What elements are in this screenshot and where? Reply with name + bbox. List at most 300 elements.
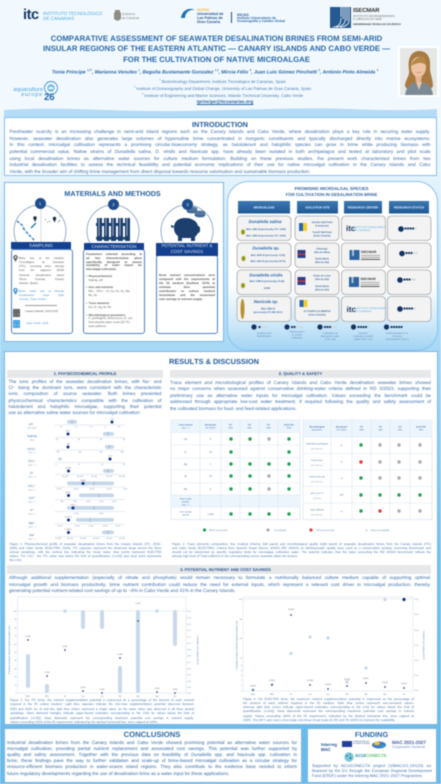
band: characterisation: CHARACTERISATION [92,244,136,249]
research center logos: INSTITUTO TECNOLÓGICO [355,306,386,310]
text: parameters intro: specifically designed to assess [86,260,142,264]
caption: figure 4: the amount of each nutrient required in the f/2 medium. Dark blue circles represent non-censored values, [243,701,414,705]
chart: physicochemical profile range plot: 5,000 [89,488,95,490]
algae icons [241,229,246,288]
isolation sites: Tenefé Salt Pans [312,231,332,234]
caption: figure 1: 2025) and Cabo Verde (ELECTRA; 2025). ITC capsules represent the observed range across the three [10,546,162,550]
right tick labels: 0.07 [187,661,192,664]
row labels: 5 [210,488,212,491]
list: parameters: NO₃⁻, PO₄³⁻, Si, Ca, Cu, Fe, Mn, [88,289,130,293]
caption: figure 3: quantification (<LOQ). Navy diamonds represent the corresponding maximum potential cost savings in nutrient supply. [10,716,194,720]
row labels: 100 [340,494,344,496]
heading: potential nutrient and cost savings: 3. POTENTIAL NUTRIENT AND COST SAVINGS [180,567,271,572]
chart: physicochemical profile range plot: 1,500 [98,512,104,515]
chart: physicochemical profile range plot: 7.8 [75,426,78,428]
text: parameters intro [86,252,142,272]
affiliations: 1 Biotechnology Department, Instituto Tecnológico de Canarias, Spain [159,79,286,84]
logo: Gobierno de Canarias: de Canarias [122,16,139,20]
row labels: Ca²⁺ [29,496,36,500]
row labels: (mg L⁻¹) [28,526,36,528]
category labels: Mn [364,693,368,696]
strain codes: BEA 1981 B (previously ITC- 5106) [246,228,286,231]
caption: figure 1: annual samplings, with the vertical line indicating the mean value; blue points represent ELECTRA [10,550,162,554]
row labels: 25 [209,451,212,454]
table: promising species [236,200,432,322]
chart: physicochemical profile range plot: 781.3 [70,504,76,506]
right tick labels: 0.03 [414,644,419,647]
logo: MAC 2021-2027: MAC 2021-2027 [392,740,426,746]
header labels: ITC [379,426,383,428]
logo: ULPGC and IOCAG: Instituto Universitario de [237,16,276,20]
text: ITC line: Tecnológico de Canarias [19,260,64,264]
category labels: Mo [155,695,159,698]
right tick labels: 0.00 [414,689,419,692]
row labels: Hg [184,463,188,466]
text: parameters intro: Parameters selected according to [86,252,142,256]
chart: physicochemical profile range plot: 200 [78,450,83,454]
left tick labels: 1 [241,684,243,687]
category labels: Co [327,693,330,696]
right tick labels: 0.10 [187,642,192,645]
chart: physicochemical profile range plot: 1,200 [98,500,104,503]
row labels: (UFC/mL) [313,497,322,500]
isolation sites: (Ilha do Sal) [315,261,329,264]
icon: grey pin [12,254,18,262]
header labels: ITC [267,424,271,426]
text: physicochemical: The ionic profiles of the seawater desalination brines, with Na⁺ and [8,379,162,384]
chart: physicochemical profile range plot: 17,000 [55,537,62,540]
right tick labels: 0.04 [414,629,419,632]
isolation sites: Pedra de Lume [313,274,331,278]
list: parameters: heterotrophic plate count (22 ºC), [88,320,130,324]
ELECTRA points [66,420,114,534]
caption: figure 4: 100%. The left Y-axis uses a two-range non-linear visual scale (0–5% and 70–100%) to improve the readability. [243,718,396,722]
strain codes [246,228,286,314]
header labels: RD 3/2023 [337,428,347,432]
logo: Gobierno de Canarias [113,9,140,22]
logo: Aquaculture Europe 26: aquaculture [13,86,43,92]
research center logos: itc [346,224,356,233]
isolation sites: (Gran Canaria) [309,314,326,316]
row labels: (mg L⁻¹) [28,464,36,466]
list: parameters: • Trace elements [86,301,109,305]
right tick labels: 0.06 [187,668,192,670]
capsules [26,609,177,693]
strain codes: BEA 1984 B (previously ITC- 5105) [246,234,286,238]
logo: ULPGC and IOCAG [180,8,286,24]
header labels: (µg L⁻¹) [182,426,189,430]
text: savings: Although additional supplementation (especially of nitrate and phosphate) would remain necessary to formulate a nutritionally balanced culture medium capable of supporting optimal [9,575,430,580]
value labels: 0.080 [26,635,30,638]
text: Cabo Verde line: Vicente, Cabo Verde) [19,297,46,301]
caption: figure 4: supply. Values exceeding 100% of the f/2 requirement, indicated by the dashed horizontal line, were capped at [243,714,414,718]
right tick labels: 0.08 [187,654,192,658]
chart: physicochemical profile range plot: 35,000 [106,475,113,478]
table headers [238,201,429,214]
left tick labels: 20 [14,676,17,678]
band: characterisation [84,243,144,250]
legend: research status scale: identification [257,335,272,338]
left tick labels: 10 [14,684,17,687]
left tick labels: 5 [241,664,243,667]
title: COMPARATIVE ASSESSMENT OF SEAWATER DESALINATION BRINES FROM SEMI-ARID [51,34,382,43]
right tick labels: 0.06 [414,598,419,601]
logo: ISECMAR: ISECMAR [353,8,379,14]
legend: quality status [202,528,390,532]
right tick labels: 0.15 [187,610,192,613]
chart: physicochemical profile range plot: 4,000 [73,488,79,490]
row labels: CO₃²⁻ [28,459,37,463]
chart: physicochemical profile range plot: 800 [60,500,65,503]
research center logos: DE CANARIAS [354,229,371,232]
category labels: Zn [403,693,406,696]
isolation sites: (Ilha do Sal) [315,278,329,281]
axis titles: Potential saving in nutrient supplementation (%) [8,625,11,674]
text: quality and safety [170,380,432,412]
logo: ACUICONECTA [344,752,390,762]
status dots [378,443,422,513]
table headers: RESEARCH STATUS [394,206,424,210]
text: parameters intro: suitability of water inputs for [86,263,142,267]
chart: physicochemical profile range plot: 36.2 [66,430,71,432]
row labels: indicator [182,500,190,504]
left tick labels: 80 [240,637,243,640]
category labels [251,693,406,696]
row labels [306,442,344,516]
row labels: Ni [184,475,187,478]
left tick labels [13,610,17,695]
band: cost savings [156,243,218,256]
row labels: (mg L⁻¹) [28,451,36,454]
band: cost savings: POTENTIAL NUTRIENT & [162,243,212,248]
section 1: physicochemical profile [7,370,163,416]
title: FOR THE CULTIVATION OF NATIVE MICROALGAE [123,55,310,64]
caption: figure 4: whereas light blue circles indicate upper-bound estimates corresponding to the LOQ for values below the limit of [243,705,414,709]
right tick labels: 0.13 [187,623,192,626]
header labels: 2025 [419,428,424,432]
number badge 2: 2 [112,202,115,206]
research center logos: ISECMAR [360,277,376,281]
chart: physicochemical profile range plot: 45 [100,438,103,441]
logo: ISECMAR [329,6,402,29]
chart: physicochemical profile range plot: 50 [123,438,126,441]
text: conclusions: brine, these findings pave the way to further validation and scale-up of brine-based microalgal cultivation as a circular strategy for [7,758,297,763]
value labels: 0.0020 [382,681,388,684]
text: cost savings: contribution to culture medium [159,289,215,293]
panel: materials and methods [4,182,224,342]
legend: research status scale: Isolation and [257,332,272,335]
heading: introduction: INTRODUCTION [192,120,248,128]
value labels: 0.000 [173,688,177,691]
text: introduction body: Verde, with the broader aim of shifting brine management from direct disposal towards resource valorisation and sustainable biomass production. [10,169,310,174]
text: ITC line: Islands, Spain). [19,281,39,285]
text: funding acknowledgement: Fund (ERDF) under the Interreg MAC 2021–2027 Programme. [312,773,423,778]
text: introduction body: In this context, microalgal cultivation represents a promising circular-bioeconomy strategy, as halotolerant and halophilic species can grow in brine while producing biomass with [10,142,430,147]
value labels: 0.0014 [401,682,407,685]
row labels: Cd [184,438,188,441]
row labels: chlorine [182,514,190,516]
species names: Navicula sp. [254,299,278,304]
caption: figure 4: quantification (<LOQ). Navy diamonds represent the corresponding maximum potential cost savings in nutrient [243,709,414,713]
caption: figure 2: already high level of Total coliforms in the corresponding source seawater (data not shown). [172,554,298,558]
text: introduction body: However, seawater desalination also generates large volumes of hypersaline brine concentrated in inorganic constituents and typically discharged directly into marine ecosystems. [10,136,430,141]
value labels: 0.000 [100,688,104,691]
status dots [229,437,291,516]
chart: ELECTRA nutrient supplementation: Potential cost savings (€/m³) [422,631,425,660]
species names [249,219,283,304]
left tick labels: 30 [14,668,17,670]
band: sampling: SAMPLING [29,243,53,248]
chart: physicochemical profile range plot: 1,000 [85,500,91,503]
left tick labels: 90 [14,618,17,621]
chart: physicochemical profile range plot: 25,000 [77,475,84,478]
text: Cabo Verde line: Brine outlet line at Melnda [19,288,64,292]
strain codes: BEA 1904 B (previously DP73) [251,260,286,263]
logo: MAC 2021-2027: Cooperación Territorial [392,744,425,748]
row labels: Total coliforms [310,508,325,512]
category labels: Fe [119,695,122,698]
legend: research status scale: cultivation at pilot [353,335,373,338]
number badge 3: 3 [186,202,189,206]
chart: physicochemical profile range plot: 17,896.2 [64,528,73,531]
value labels: 0.0028 [344,678,350,681]
header labels: ITC [360,426,364,428]
list: parameters: • Physicochemical: [86,274,113,278]
legend: research status scale: laboratory scale [321,335,340,338]
affiliations: 3 Institute of Engineering and Marine Sciences, Atlantic Technical University, Cabo Verde [142,92,303,98]
legend: research status scale: Demonstration in a [386,332,408,335]
row labels: Salinity [27,434,37,438]
table headers: ISOLATION SITE [305,206,330,210]
legend: research status scale: Maintenance [290,330,305,334]
range capsules [58,420,114,534]
heading: conclusions: CONCLUSIONS [124,730,180,739]
list: parameters: Salinity, pH [88,278,103,282]
text: Cabo Verde line [18,288,64,301]
logo: ISECMAR: UNIVERSIDADE TÉCNICA DO ATLÂNTICO [353,22,401,26]
row labels: Na⁺ [29,533,35,537]
research center logos: ISECMAR [361,250,377,254]
caption: figure 1 [9,542,162,562]
row labels: (UFC/100 mL) [311,448,323,450]
legend: research status scale: Cultivation at [322,332,338,335]
strain codes: BEA 2864 B [261,308,275,310]
panel: conclusions [4,728,302,782]
right tick labels: 0.05 [414,613,419,616]
chart: physicochemical profile range plot: 150 [56,450,61,454]
axis titles: Potential saving in nutrient supplementation (%) [236,620,238,669]
text: co-funded: la Unión Europea [353,743,370,745]
text: introduction body: industrial desalination facilities to assess the technical feasibility and potential economic implications of their use for native microalgal cultivation in the Canary Islands and Cabo [10,162,430,167]
chart: physicochemical profile range plot: 1,400 [111,500,117,503]
chart: physicochemical profile range plot: 6,000 [106,488,112,490]
row labels [179,438,214,516]
row labels: 20 [209,475,212,478]
strain codes: (previously ITC-ME-2017) [253,311,283,314]
legend: research status scale [250,324,409,341]
logo: Aquaculture Europe 26: europe [21,92,43,98]
axes [55,425,125,536]
affiliations [134,78,312,98]
flags [298,223,308,307]
row labels: (psu) [30,438,35,442]
legend: quality status: Unavailable [274,529,287,532]
table: trace elements [170,419,301,520]
text: physicochemical: physicochemical characteristics compatible with the cultivation of [8,398,162,403]
caption: figure 4: Figure 4. For ELECTRA brine, the maximum nutrient supplementation potential is expressed as the percentage of [243,697,414,701]
chart: physicochemical profile range plot: 40,000 [119,475,126,478]
value labels: 0.0035 [269,679,275,682]
chart: physicochemical profile range plot: 19,280 [65,466,72,470]
value labels: 0.0009 [325,683,331,686]
section 2: quality and safety [170,370,432,412]
chart: physicochemical profile range plot: 900 [73,500,78,503]
icon: map circle [13,204,67,242]
chart: physicochemical profile range plot: 8 [104,426,106,428]
chart: physicochemical profile range plot: 35 [56,438,59,441]
row labels: Cl⁻ [30,471,35,475]
affiliations: 2 Institute of Oceanography and Global Change, University of Las Palmas de Gran Canaria, Spain [134,85,311,91]
right tick labels: 0.12 [187,629,192,632]
caption: figure 2: should not be interpreted as specific regulatory limits for microalgae cultivation water. The asterisk indicates that the value exceeding the RD 3/2023 benchmark reflects the [172,550,431,554]
row labels: (mg L⁻¹) [28,538,36,540]
table: microbiological quality: ** [382,507,384,510]
logo: ULPGC and IOCAG: IOCAG [237,12,249,16]
text: conclusions: resource-efficient biomass production in water-scarce island regions. They also contribute to the evidence base needed to inform [7,764,297,769]
isolation sites: 27.27499ºN 15.42899ºW [304,310,331,313]
right tick labels: 0.14 [187,616,192,620]
chart: physicochemical profile range plot: 23,000 [80,537,87,540]
heading: physicochemical profile [7,370,163,378]
list: parameters: C. perfringens, Enterococci, E. coli, [88,316,133,320]
table: trace elements: - [269,451,270,454]
left tick labels: 0 [15,692,17,695]
chart: ITC nutrient supplementation: Potential cost savings (€/m³) [196,636,199,665]
text: cost savings: formulation and the associated [159,293,215,297]
logo: ACUICONECTA: ACUICONECTA [355,752,386,758]
category labels: Cu [309,693,312,696]
icon: test tubes circle [86,204,140,244]
text: cost savings: cost savings in nutrient supply [159,297,202,301]
category labels [26,695,177,698]
chart: physicochemical profile range plot: 3,840 [80,479,86,482]
text: funding acknowledgement [312,762,432,778]
research status dots [397,226,418,312]
text: physicochemical: use as alternative saline water sources for microalgal cultivation. [8,410,141,415]
title: INSULAR REGIONS OF THE EASTERN ATLANTIC — CANARY ISLANDS AND CABO VERDE — [43,44,390,53]
text: Cabo Verde line: desalination plant (São [19,293,64,297]
text: ITC line [18,256,64,285]
header labels: 2025 [287,426,292,430]
logo: ULPGC and IOCAG: ULPGC [197,8,210,12]
text: savings: generating potential nutrient-related cost savings of up to ~8% in Cabo Verde and 41% in the Canary Islands. [9,588,236,593]
text: savings [9,575,430,594]
value labels: 0.0036 [307,679,313,682]
legend: research status scale: environment (TRL7) [385,338,409,341]
text: Cabo Verde dates: Cabo Verde: 2025 [26,322,48,324]
category labels: Fe [346,693,349,696]
right tick labels: 0.04 [187,680,192,683]
heading: promising species [285,186,378,197]
text: co-funded: Cofinanciado por [353,740,370,742]
text: cost savings: Brine nutrient concentrations were [159,273,215,277]
header labels: 2025 [266,426,272,430]
header labels: Trace element [179,424,193,426]
left tick labels: 70 [240,657,243,660]
light blue circles [251,598,387,692]
logo: ISECMAR: E CIÊNCIAS DO MAR [353,17,382,21]
title [42,34,390,64]
left tick labels: 90 [240,618,243,621]
section 3: potential nutrient and cost savings [7,565,431,594]
right tick labels [187,610,192,695]
value labels: 0.003 [81,686,85,689]
chart: physicochemical profile range plot: 29,000 [106,537,113,540]
chart: physicochemical profile range plot: 3,000 [88,524,94,528]
table headers: RESEARCH CENTER [348,206,379,210]
text: cost savings: estimate their potential [159,285,215,289]
header labels [309,426,426,432]
table: trace elements: - [250,451,251,454]
header labels: ELECTRA [416,426,426,428]
chart: physicochemical profile range plot: 26,000 [93,537,100,540]
heading: promising species: FOR CULTIVATION IN DESALINATION BRINE [286,192,377,197]
logo: ITC: DE CANARIAS [43,16,74,21]
header labels: Benchmark [205,424,217,426]
panel: introduction [4,116,437,176]
legend: research status scale: collection [292,336,303,340]
row labels: (mg L⁻¹) [182,504,190,506]
row labels: (UFC/100 mL) [311,464,323,467]
header labels: RD 3/2023 [206,426,216,430]
chart: physicochemical profile range plot [26,418,128,540]
photo: author portrait [398,46,439,97]
chart: physicochemical profile range plot: 250 [99,450,104,454]
header labels: Benchmark [336,426,348,428]
text: ITC line: from the adjacent IDAM [19,268,64,272]
text: funding acknowledgement: financed by the EU through the European Regional Development [312,768,432,773]
chart: physicochemical profile range plot: 154 [66,442,71,446]
text: cost savings [158,273,216,302]
card: sampling [11,249,73,334]
row labels: Clostridium perfringens [306,442,329,446]
isolation sites: (Lanzarote) [315,224,329,228]
value labels: 0.000 [155,687,159,690]
header labels: parameters [312,428,322,432]
text: quality and safety: addressed through appropriate low-cost water treatment, if required following the quality and safety assessment of [170,399,431,404]
text: quality and safety: the cultivated biomass for food- and feed-related applications. [170,406,297,410]
logo: ULPGC and IOCAG: Universidad de [197,12,223,16]
logo: Interreg MAC [321,740,356,754]
chart: physicochemical profile range plot: 2,000 [57,524,63,528]
text: physicochemical [8,379,162,416]
text: introduction body: potential commercial value. Native strains of Dunaliella salina, D. viridis and Navicula spp. have already been isolated in both archipelagos and tested at laboratory and pilot scale [10,149,431,154]
text: conclusions: Industrial desalination brines from the Canary Islands and Cabo Verde showed promising potential as alternative water sources for [7,740,297,744]
email: tprincipe@itccanarias.org [197,99,253,104]
chart: physicochemical profile range plot: 7,000 [122,488,128,490]
category labels: Si [290,693,293,696]
value labels: 0.038 [118,653,122,656]
row labels: (mg L⁻¹) [28,512,36,516]
chart: ELECTRA nutrient supplementation [232,594,436,698]
value labels: 0.029 [45,671,49,674]
chart: physicochemical profile range plot: 20,000 [62,475,69,478]
list: parameters: Mo, Zn [88,293,97,297]
header labels: 2023 [359,428,365,432]
caption: figure 2: and Cabo Verde (ELECTRA). Criteria from Spanish Royal Decree 3/2023 (RD 3/2023) on drinking-water quality were used as a conservative sanitary screening benchmark and [172,546,431,550]
row labels: Enterococci [311,459,323,462]
value labels: 0.061 [63,645,67,648]
